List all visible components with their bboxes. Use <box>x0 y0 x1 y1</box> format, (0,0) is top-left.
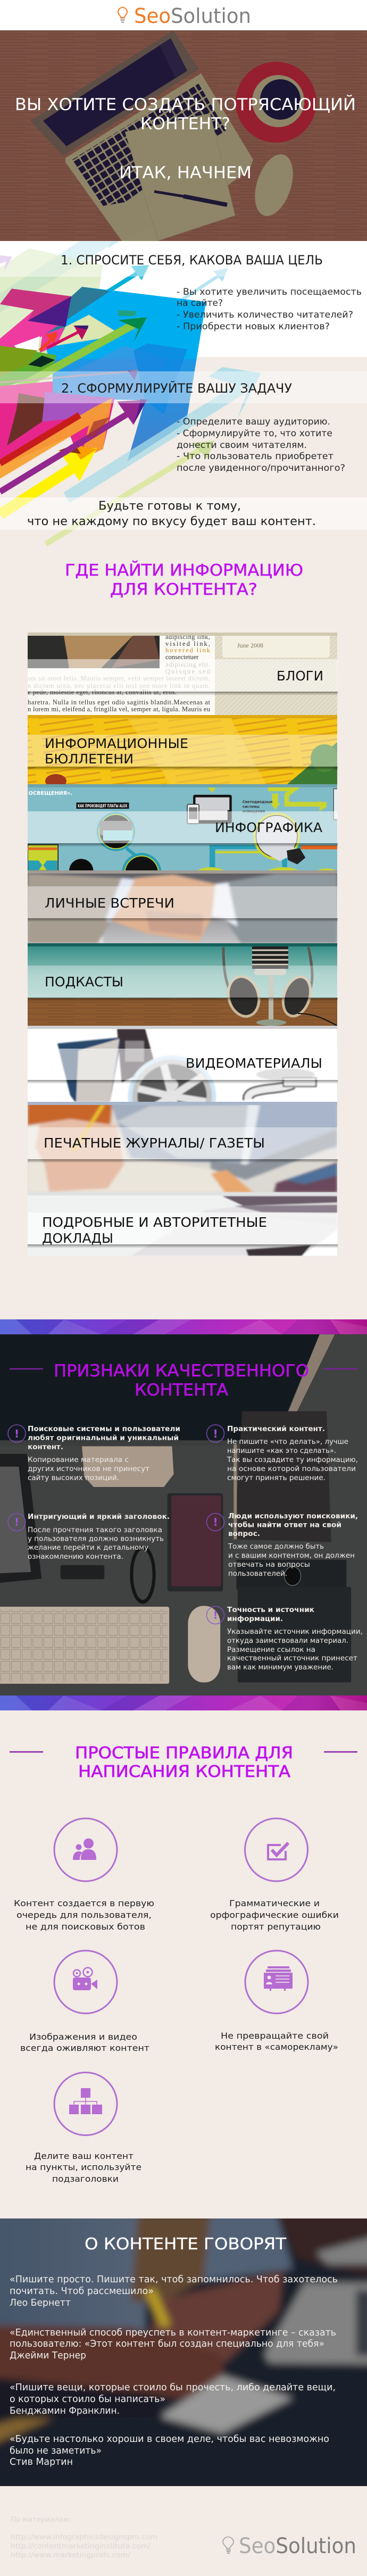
quote: Steve Martin: «Будьте настолько хороши в своем деле, чтобы вас невозможно <box>10 2434 329 2445</box>
step 2 tips: - Определите вашу аудиторию. <box>177 417 330 427</box>
strip: detailed reports <box>28 1192 337 1256</box>
strip: video materials <box>28 1026 337 1102</box>
strip: personal meetings (handshake) <box>28 870 337 943</box>
warning text <box>27 500 316 528</box>
header: logo SeoSolution <box>0 0 367 30</box>
icon: business cards in circle <box>245 1950 308 2013</box>
rule 3: images and video: Изображения и видео <box>29 2032 137 2042</box>
quote: Benjamin Franklin: о которых стоило бы написать» <box>10 2394 165 2405</box>
item: practical content: смогут принять решение. <box>227 1474 326 1482</box>
strip: blogs: n lorem mi, eleifend a, fringilla vel, semper at, ligula. Mauris eu <box>28 705 211 713</box>
rule 2: grammar: орфографические ошибки <box>210 1910 339 1920</box>
icon: people in circle <box>54 1818 117 1881</box>
band: infographics <box>28 811 338 847</box>
rule 1: content for users: Контент создается в первую <box>14 1898 154 1908</box>
icon: exclamation circle <box>206 1513 224 1531</box>
item: accuracy and sources: откуда заимствовали материал. <box>227 1636 348 1645</box>
item: original content: любят оригинальный и уникальный <box>28 1434 179 1442</box>
band: print magazines <box>28 1127 338 1163</box>
item: practical content: Не пишите «что делать», лучше <box>227 1437 348 1446</box>
item: catchy headline: ознакомлению контента. <box>28 1552 123 1561</box>
quote: Benjamin Franklin: «Пишите вещи, которые стоило бы прочесть, либо делайте вещи, <box>10 2382 336 2393</box>
strip: infographics: КАК ПРОИЗВОДЯТ ПЛАТЫ ALOX <box>78 803 128 808</box>
heading: where to find information <box>65 561 303 599</box>
band: personal meetings: ЛИЧНЫЕ ВСТРЕЧИ <box>45 895 174 911</box>
band: blogs: БЛОГИ <box>277 668 323 684</box>
pen <box>154 192 184 196</box>
strip: blogs: am sit amet felis. Mauris semper, velit semper laoreet dictum, <box>28 675 210 682</box>
item: catchy headline: у пользователя должно возникнуть <box>28 1534 164 1543</box>
rule 5: use subheadings: на пункты, используйте <box>26 2162 141 2172</box>
item: accuracy and sources: информации. <box>227 1615 283 1623</box>
icon: checkbox in circle <box>245 1818 307 1881</box>
quote: Jamie Turner <box>10 2328 336 2361</box>
item: original content: других источников не принесут <box>28 1465 149 1473</box>
notepad <box>154 221 218 241</box>
band: detailed reports <box>28 1212 338 1248</box>
step 2 tips: - Что пользователь приобретет <box>177 451 333 462</box>
step 2 tips: - Сформулируйте то, что хотите <box>177 428 332 439</box>
strip: infographics: Светодиодные <box>243 800 273 804</box>
item: people search for answers: Тоже самое должно быть <box>228 1542 324 1551</box>
rule 5: use subheadings: Делите ваш контент <box>34 2151 134 2161</box>
step 2 tips: после увиденного/прочитанного? <box>177 463 345 473</box>
band: newsletters <box>28 735 338 770</box>
band: newsletters: ИНФОРМАЦИОННЫЕ <box>45 736 188 751</box>
item: original content: Копирование материала с <box>28 1456 129 1464</box>
item: people search for answers: отвечать на вопросы <box>228 1560 310 1569</box>
hero title: ВЫ ХОТИТЕ СОЗДАТЬ ПОТРЯСАЮЩИЙ <box>15 95 356 114</box>
item: people search for answers <box>206 1512 358 1578</box>
item: accuracy and sources: Размещение ссылок на <box>227 1646 315 1654</box>
warning text: что не каждому по вкусу будет ваш контент. <box>27 515 316 528</box>
step 1 heading: 1. СПРОСИТЕ СЕБЯ, КАКОВА ВАША ЦЕЛЬ <box>61 253 323 268</box>
rule 3: images and video <box>20 1950 149 2053</box>
step 2 tips <box>177 417 345 473</box>
icon: hierarchy chart in circle <box>54 2073 117 2135</box>
item: accuracy and sources <box>206 1606 363 1672</box>
decorative top purple bar <box>0 1319 367 1334</box>
icon: orange light bulb <box>118 7 127 22</box>
band: video materials: ВИДЕОМАТЕРИАЛЫ <box>186 1056 322 1071</box>
strip: blogs: visited link, <box>165 640 210 647</box>
icon: exclamation circle: ! <box>213 1609 218 1622</box>
hero panel: laptop on wooden desk <box>0 30 367 241</box>
step 1 questions <box>177 287 362 332</box>
heading: signs of quality content: ПРИЗНАКИ КАЧЕСТВЕННОГО <box>54 1361 309 1381</box>
icon: movie camera in circle <box>54 1950 117 2013</box>
footer sources: http://www.infographicsdesignspro.com <box>11 2533 157 2541</box>
item: people search for answers: чтобы найти ответ на свой <box>228 1520 341 1529</box>
rule 2: grammar: портят репутацию <box>231 1922 321 1932</box>
icon: exclamation circle: ! <box>14 1427 19 1440</box>
rule 2: grammar: Грамматические и <box>229 1898 320 1908</box>
translucent heading bands <box>0 241 367 530</box>
colorful arrows illustration <box>0 241 261 544</box>
rule 3: images and video: всегда оживляют контент <box>20 2043 149 2053</box>
quote: Benjamin Franklin <box>10 2382 336 2416</box>
quote: Leo Burnett <box>10 2274 338 2308</box>
item: people search for answers: Люди используют поисковики, <box>228 1512 358 1520</box>
rule 1: content for users: очередь для пользователя, <box>16 1910 152 1920</box>
strip: infographics: освещения <box>243 809 265 813</box>
heading: simple rules: ПРОСТЫЕ ПРАВИЛА ДЛЯ <box>75 1744 293 1763</box>
band: podcasts <box>28 966 338 1001</box>
band: detailed reports: ПОДРОБНЫЕ И АВТОРИТЕТНЫЕ <box>42 1215 267 1230</box>
strip: blogs: consectetuer <box>165 653 199 661</box>
icon: exclamation circle: ! <box>14 1516 19 1528</box>
logo text: SeoSolution <box>134 4 251 28</box>
quote: Leo Burnett: почитать. Чтоб рассмешило» <box>10 2286 154 2297</box>
heading: signs of quality content <box>10 1361 357 1400</box>
strip: print magazines <box>28 1102 337 1192</box>
strip: blogs: e pede, molestie eget, rhoncus at, convallis ut, eros. <box>28 688 177 696</box>
strip: newsletters <box>28 715 338 788</box>
strip: blogs <box>28 633 337 715</box>
band: podcasts: ПОДКАСТЫ <box>45 974 123 990</box>
item: catchy headline <box>8 1513 170 1561</box>
item: catchy headline: После прочтения такого заголовка <box>28 1526 162 1534</box>
item: accuracy and sources: вам как минимум уважение. <box>227 1663 333 1672</box>
rule 4: no self promotion: Не превращайте свой <box>221 2031 329 2041</box>
strip: podcasts <box>28 943 337 1026</box>
item: original content <box>8 1425 180 1482</box>
item: people search for answers: пользователей. <box>228 1569 287 1578</box>
item: practical content: Практический контент. <box>227 1425 325 1433</box>
rule 1: content for users <box>14 1818 154 1932</box>
rule 4: no self promotion <box>215 1950 338 2052</box>
quote: Steve Martin: Стив Мартин <box>10 2457 73 2467</box>
strip: blogs: adipiscing link, <box>165 633 210 641</box>
band: infographics: ИНФОГРАФИКА <box>215 820 322 835</box>
rule 1: content for users: не для поисковых ботов <box>26 1922 145 1932</box>
item: catchy headline: желание перейти к детальному <box>28 1543 148 1552</box>
strip: infographics <box>28 784 337 870</box>
item: accuracy and sources: Указывайте источник информации, <box>227 1627 363 1636</box>
rule 5: use subheadings: подзаголовки <box>52 2174 119 2184</box>
heading: what people say about content: О КОНТЕНТЕ ГОВОРЯТ <box>85 2235 287 2254</box>
item: people search for answers: и с вашим контентом, он должен <box>228 1551 355 1560</box>
rule 5: use subheadings <box>26 2073 141 2184</box>
item: original content: Поисковые системы и пользователи <box>28 1425 180 1433</box>
quote: Steve Martin: было не заметить» <box>10 2446 102 2456</box>
icon: exclamation circle <box>206 1607 224 1624</box>
item: accuracy and sources: качественный источник принесет <box>227 1654 357 1663</box>
icon: exclamation circle <box>206 1425 224 1442</box>
item: practical content <box>206 1425 358 1482</box>
icon: grey light bulb <box>223 2537 233 2553</box>
panel: signs of quality content, desk photo <box>0 1334 367 1696</box>
item: practical content: Так вы создадите ту информацию, <box>227 1456 358 1464</box>
item: original content: сайту высоких позиций. <box>28 1474 119 1482</box>
band: personal meetings <box>28 886 338 922</box>
icon: exclamation circle: ! <box>213 1427 218 1440</box>
icon: exclamation circle <box>8 1425 26 1442</box>
item: catchy headline: Интригующий и яркий заголовок. <box>28 1513 170 1521</box>
rule 4: no self promotion: контент в «саморекламу» <box>215 2042 338 2052</box>
footer sources <box>11 2516 157 2560</box>
band: print magazines: ПЕЧАТНЫЕ ЖУРНАЛЫ/ ГАЗЕТЫ <box>44 1135 265 1151</box>
quote: Leo Burnett: «Пишите просто. Пишите так, чтоб запомнилось. Чтоб захотелось <box>10 2274 338 2285</box>
laptop lid <box>30 30 199 156</box>
heading: simple rules <box>10 1744 357 1781</box>
hero title: ИТАК, НАЧНЕМ <box>119 163 252 182</box>
footer sources: http://www.marketingprofs.com/ <box>11 2552 131 2560</box>
band: detailed reports: ДОКЛАДЫ <box>42 1231 113 1246</box>
band: newsletters: БЮЛЛЕТЕНИ <box>45 751 134 767</box>
heading: where to find information: ДЛЯ КОНТЕНТА? <box>110 580 257 599</box>
heading: simple rules: НАПИСАНИЯ КОНТЕНТА <box>78 1763 291 1781</box>
band: blogs <box>28 659 338 695</box>
strip: infographics: системы <box>243 804 260 809</box>
quote: Jamie Turner: Джейми Тернер <box>10 2350 86 2361</box>
step 2 heading: 2. СФОРМУЛИРУЙТЕ ВАШУ ЗАДАЧУ <box>61 380 292 396</box>
item: accuracy and sources: Точность и источник <box>227 1606 314 1614</box>
item: practical content: на основе которой пользователи <box>227 1465 356 1473</box>
heading: where to find information: ГДЕ НАЙТИ ИНФОРМАЦИЮ <box>65 561 303 580</box>
coffee cup on red saucer <box>236 62 316 143</box>
icon: exclamation circle: ! <box>213 1516 218 1528</box>
strip: blogs: hovered link <box>165 646 211 654</box>
step 2 tips: донести своим читателям. <box>177 440 307 451</box>
step 1 questions: - Увеличить количество читателей? <box>177 310 353 320</box>
decorative bottom purple bar <box>0 1696 367 1710</box>
item: original content: контент. <box>28 1443 63 1451</box>
step 1 questions: на сайте? <box>177 298 223 309</box>
hero title: КОНТЕНТ? <box>140 114 230 134</box>
icon: exclamation circle <box>8 1513 26 1531</box>
item: people search for answers: вопрос. <box>228 1530 260 1538</box>
hero title <box>15 95 356 182</box>
strip: blogs: adipiscing elit. <box>165 661 210 668</box>
laptop base <box>65 73 253 241</box>
heading: signs of quality content: КОНТЕНТА <box>135 1381 228 1400</box>
footer sources: http://contentmarketinginstitute.com/ <box>11 2542 151 2550</box>
quote: Jamie Turner: «Единственный способ преуспеть в контент-маркетинге – сказать <box>10 2328 336 2338</box>
strip: blogs: Quisque sed <box>165 668 211 675</box>
step 1 questions: - Вы хотите увеличить посещаемость <box>177 287 362 297</box>
strip: blogs: June 2008 <box>237 642 263 649</box>
rule 2: grammar <box>210 1818 339 1932</box>
panel: quotes, writing hand photo <box>0 2213 367 2492</box>
quote: Jamie Turner: пользователю: «Этот контент был создан специально для тебя» <box>10 2339 324 2349</box>
icon: studio microphone with headphones <box>223 946 337 1026</box>
item: practical content: напишите «как это сделать». <box>227 1447 336 1455</box>
step 1 questions: - Приобрести новых клиентов? <box>177 321 330 332</box>
quote: Steve Martin <box>10 2434 329 2467</box>
footer sources: По материалам: <box>11 2516 71 2524</box>
warning text: Будьте готовы к тому, <box>98 500 241 513</box>
strip: blogs: n dictum urna, nec placerat elit nisl one more link in quam. <box>28 682 210 689</box>
band: video materials <box>28 1049 338 1084</box>
quote: Leo Burnett: Лео Бернетт <box>10 2298 71 2308</box>
strip: infographics: ОСВЕЩЕНИЯ». <box>29 791 72 796</box>
mouse <box>255 154 293 216</box>
quote: Benjamin Franklin: Бенджамин Франклин. <box>10 2406 120 2416</box>
section background: goal and task <box>0 241 367 357</box>
footer logo: SeoSolution <box>239 2534 356 2558</box>
strip: blogs: haretra. Nulla in tellus eget odio sagittis blandit.Maecenas at <box>28 699 211 706</box>
